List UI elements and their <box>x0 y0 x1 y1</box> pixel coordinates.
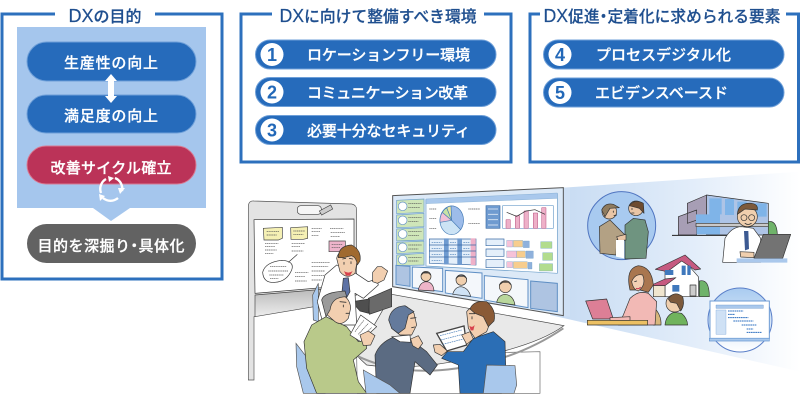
panel: environment to prepare <box>241 6 511 162</box>
laptop on table <box>368 288 392 314</box>
panel: DX promotion requirements <box>530 6 798 162</box>
man in blue suit with tablet <box>433 301 517 393</box>
heading: environment: DXに向けて整備すべき環境 <box>280 6 476 26</box>
bar and line chart <box>503 206 553 228</box>
item 1: 1 <box>267 45 277 65</box>
item 5: 5 <box>555 83 565 103</box>
light blue backing with arrow <box>17 27 206 221</box>
item 5: エビデンスベースド <box>595 84 728 102</box>
user list <box>397 199 424 266</box>
circle: handshake <box>588 192 656 260</box>
legend list <box>486 206 500 228</box>
data table <box>429 238 476 265</box>
item 2: 2 <box>267 82 277 102</box>
item 1: ロケーションフリー環境 <box>307 47 470 64</box>
pill: improvement cycle: 改善サイクル確立 <box>50 160 172 177</box>
heading: DX purpose: DXの目的 <box>68 6 142 26</box>
circle: document screen <box>708 288 772 352</box>
heading: requirements: DX促進・定着化に求められる要素 <box>544 6 780 26</box>
icon: cycle arrows <box>99 176 125 201</box>
item 4: プロセスデジタル化 <box>596 46 731 64</box>
illustration: meeting room <box>248 188 570 393</box>
pill: deep dive <box>27 224 196 263</box>
schedule matrix <box>486 239 553 271</box>
presenter <box>313 245 388 325</box>
house with woman and child <box>586 255 709 325</box>
pill: deep dive: 目的を深掘り・具体化 <box>38 238 184 255</box>
dashboard <box>426 193 557 273</box>
item 3: 必要十分なセキュリティ <box>307 123 470 140</box>
whiteboard <box>248 201 357 380</box>
item 4 <box>544 40 784 69</box>
pill: satisfaction: 満足度の向上 <box>64 108 158 125</box>
wall display <box>393 188 570 317</box>
man in green jacket <box>296 291 377 393</box>
pie chart <box>440 206 464 235</box>
remote participants <box>418 271 515 305</box>
video tiles <box>396 265 557 312</box>
projection beam <box>550 172 800 372</box>
building with office worker <box>672 195 791 263</box>
item 2 <box>256 78 496 106</box>
item 5 <box>544 78 784 107</box>
panel: DX purpose <box>2 6 222 279</box>
meeting table <box>352 288 564 393</box>
icon: double arrow <box>105 74 117 103</box>
pill: productivity <box>27 42 196 81</box>
pill: satisfaction <box>27 95 196 133</box>
item 4: 4 <box>555 45 565 65</box>
item 2: コミュニケーション改革 <box>307 85 468 102</box>
man in grey suit <box>363 306 437 393</box>
illustration: projected remote workers <box>550 172 800 372</box>
pill: improvement cycle <box>27 146 196 184</box>
item 1 <box>256 40 496 69</box>
pill: productivity: 生産性の向上 <box>64 55 158 72</box>
item 3 <box>256 116 496 144</box>
item 3: 3 <box>267 120 277 140</box>
